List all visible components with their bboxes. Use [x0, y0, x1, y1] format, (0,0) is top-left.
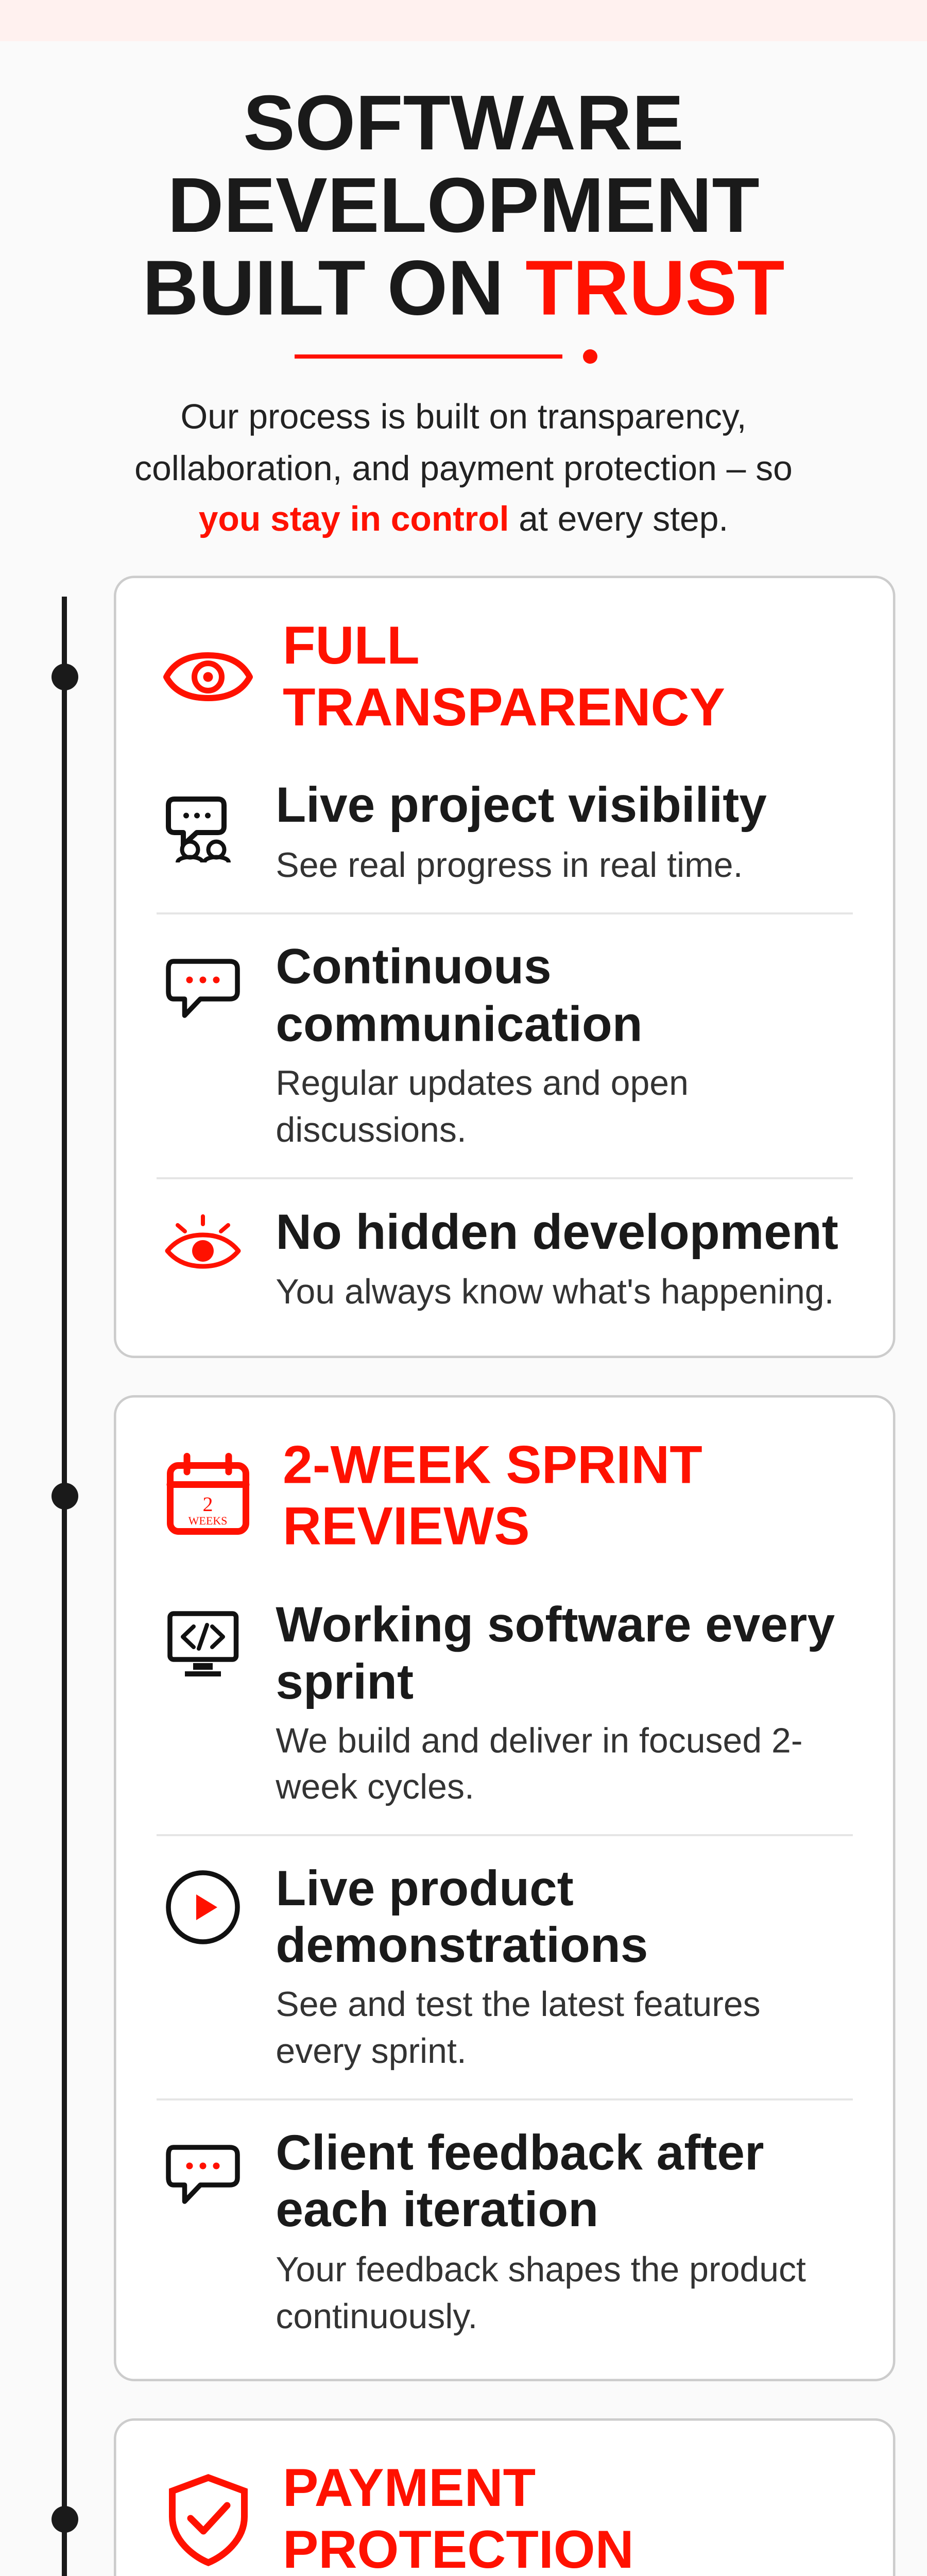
item: client feedback: continuously.: [276, 2297, 477, 2336]
title: [142, 79, 785, 331]
panel: payment protection: [115, 2419, 894, 2576]
item: working software every sprint: Working software every: [276, 1597, 835, 1652]
timeline: [52, 597, 78, 2576]
item: client feedback: Your feedback shapes the product: [276, 2250, 806, 2289]
icon: shield check: [172, 2478, 244, 2563]
item: no hidden development: You always know what's happening.: [276, 1272, 834, 1311]
item: live project visibility: Live project visibility: [276, 777, 767, 833]
item: no hidden development: [276, 1205, 838, 1311]
title: SOFTWARE: [243, 79, 684, 166]
intro text: collaboration, and payment protection – so: [134, 449, 793, 488]
heading: full transparency: TRANSPARENCY: [283, 677, 725, 737]
panel: 2-week sprint reviews: [115, 1396, 894, 2380]
item: continuous communication: [276, 939, 689, 1149]
title accent rule with dot: [295, 349, 597, 364]
item: no hidden development: No hidden development: [276, 1205, 838, 1260]
heading: payment protection: PAYMENT: [283, 2458, 536, 2518]
icon: project visibility: [168, 799, 229, 862]
heading: 2-week sprint reviews: 2-WEEK SPRINT: [283, 1435, 702, 1495]
title: BUILT ON TRUST: [142, 244, 785, 331]
item: working software every sprint: We build and deliver in focused 2-: [276, 1721, 803, 1760]
heading: 2-week sprint reviews: REVIEWS: [283, 1496, 530, 1556]
panel: full transparency: [115, 577, 894, 1357]
item: client feedback: each iteration: [276, 2182, 598, 2237]
item: client feedback: [276, 2125, 806, 2336]
icon: calendar: WEEKS: [188, 1514, 227, 1527]
title: DEVELOPMENT: [167, 161, 760, 248]
item: live product demonstrations: demonstrations: [276, 1918, 648, 1973]
heading: full transparency: FULL: [283, 616, 420, 675]
item: continuous communication: Regular updates and open: [276, 1063, 689, 1103]
item: working software every sprint: [275, 1597, 835, 1806]
icon: eye: [166, 655, 250, 698]
icon: calendar: [170, 1456, 246, 1531]
intro text: Our process is built on transparency,: [180, 398, 747, 436]
item: live project visibility: See real progress in real time.: [276, 845, 743, 885]
item: working software every sprint: week cycles.: [275, 1767, 474, 1806]
item: working software every sprint: sprint: [276, 1654, 414, 1709]
icon: eye with rays: [167, 1216, 238, 1266]
icon: feedback bubble: [168, 2147, 237, 2201]
icon: speech bubble: [168, 961, 237, 1015]
icon: code monitor: [170, 1614, 236, 1676]
item: live project visibility: [276, 777, 767, 885]
item: continuous communication: Continuous: [276, 939, 552, 994]
item: continuous communication: communication: [276, 996, 643, 1052]
icon: calendar: 2: [203, 1493, 213, 1516]
item: live product demonstrations: [276, 1861, 761, 2071]
icon: play circle: [168, 1873, 237, 1942]
intro text: [134, 398, 793, 538]
item: continuous communication: discussions.: [276, 1110, 467, 1149]
item: client feedback: Client feedback after: [276, 2125, 764, 2180]
intro text: you stay in control at every step.: [199, 500, 728, 538]
item: live product demonstrations: See and test the latest features: [276, 1985, 761, 2024]
item: live product demonstrations: Live product: [276, 1861, 574, 1916]
item: live product demonstrations: every sprint.: [276, 2031, 467, 2071]
